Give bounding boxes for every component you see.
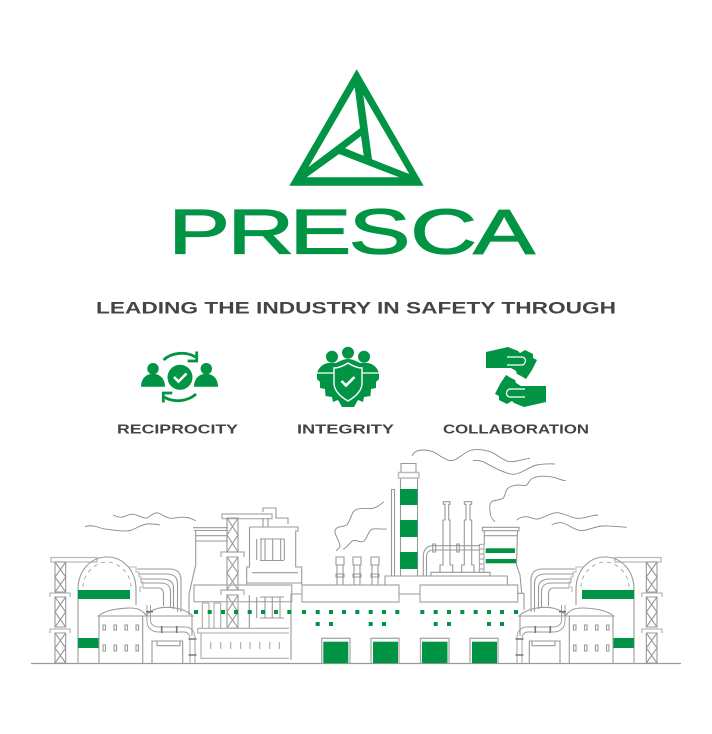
small stacks (336, 557, 379, 585)
label: reciprocity: RECIPROCITY (117, 422, 239, 436)
icon: reciprocity (141, 352, 218, 402)
green doors (322, 638, 498, 663)
wordmark: PRESCA: PRESCA (168, 196, 535, 267)
central boxes (302, 585, 518, 602)
box connectors (399, 593, 524, 610)
label: integrity: INTEGRITY (297, 422, 395, 436)
icon: integrity (317, 347, 379, 407)
right plant wing (mirror) (516, 557, 662, 663)
right cooling tower (479, 527, 522, 593)
reactor dome (78, 557, 136, 663)
left plant wing (50, 557, 196, 663)
label: collaboration: COLLABORATION (443, 422, 589, 436)
green dot rows (194, 610, 518, 626)
logo mark: triangle (289, 69, 424, 186)
illustration: industrial plant (31, 450, 681, 664)
smoke (85, 450, 627, 551)
twin stacks and pipe (423, 502, 490, 576)
heading: LEADING THE INDUSTRY IN SAFETY THROUGH (96, 299, 616, 318)
ground line (31, 662, 681, 664)
chimney (385, 464, 507, 585)
crane tower (221, 514, 272, 628)
lattice tower (50, 558, 97, 663)
central building (194, 508, 302, 660)
left cooling tower (189, 528, 228, 615)
annex building (98, 605, 196, 663)
curved pipes (137, 569, 181, 612)
icon: collaboration (486, 347, 546, 407)
